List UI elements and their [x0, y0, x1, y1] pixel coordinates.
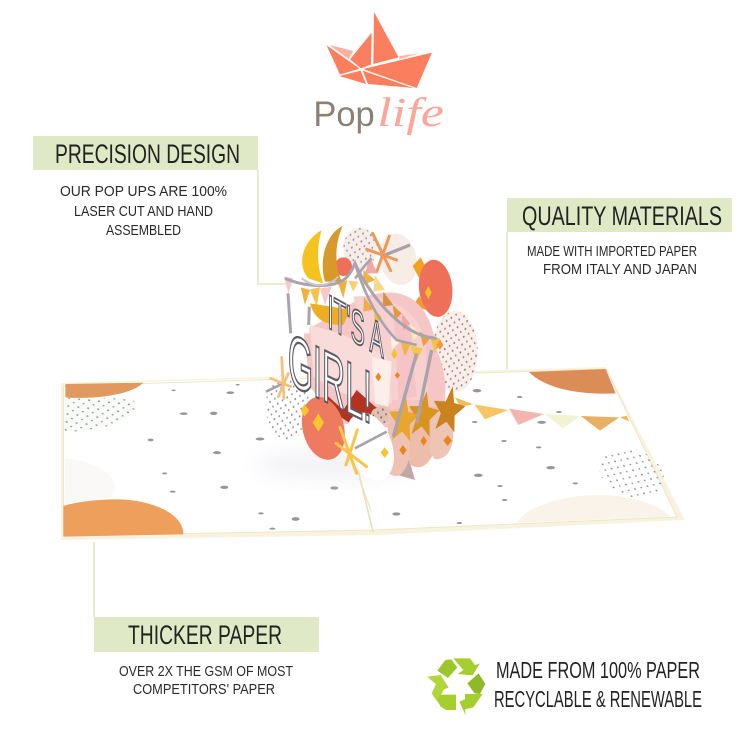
callout: precision design: PRECISION DESIGN [55, 139, 240, 169]
logo: Poplife boat [313, 12, 444, 136]
callout: precision design: LASER CUT AND HAND [74, 203, 213, 220]
right panel artwork [392, 369, 671, 524]
bunting [455, 397, 629, 431]
pink paper layers [303, 292, 453, 480]
logo wordmark: life [377, 90, 444, 136]
connector lines [94, 170, 507, 617]
shadow under pop-up [255, 449, 415, 481]
back balloons and moons [302, 226, 478, 392]
logo wordmark: Pop [313, 95, 375, 134]
callout: precision design [33, 136, 258, 239]
icon: recycling symbol [427, 658, 485, 715]
bunting frame and flags [284, 257, 440, 363]
callout: quality materials: FROM ITALY AND JAPAN [543, 261, 697, 278]
pop-up sculpture: it's a girl: GIRL! [288, 316, 372, 440]
open card base [61, 367, 685, 540]
callout: thicker paper: THICKER PAPER [128, 620, 282, 650]
pop-up sculpture: it's a girl: IT'S A [328, 284, 384, 369]
front balloons and stars [266, 339, 468, 510]
callout: thicker paper: COMPETITORS' PAPER [133, 681, 275, 698]
callout: quality materials [507, 198, 732, 278]
logo wordmark [313, 90, 444, 136]
recycling statement [494, 657, 702, 712]
fold line [352, 445, 373, 532]
callout: precision design: OUR POP UPS ARE 100% [60, 183, 227, 200]
callout: thicker paper [94, 617, 319, 698]
callout: thicker paper: OVER 2X THE GSM OF MOST [119, 663, 293, 680]
greeting: it's a girl [288, 284, 384, 440]
pop-up sculpture: it's a girl [266, 226, 478, 510]
callout: precision design: ASSEMBLED [106, 222, 181, 239]
left panel artwork [63, 383, 338, 537]
